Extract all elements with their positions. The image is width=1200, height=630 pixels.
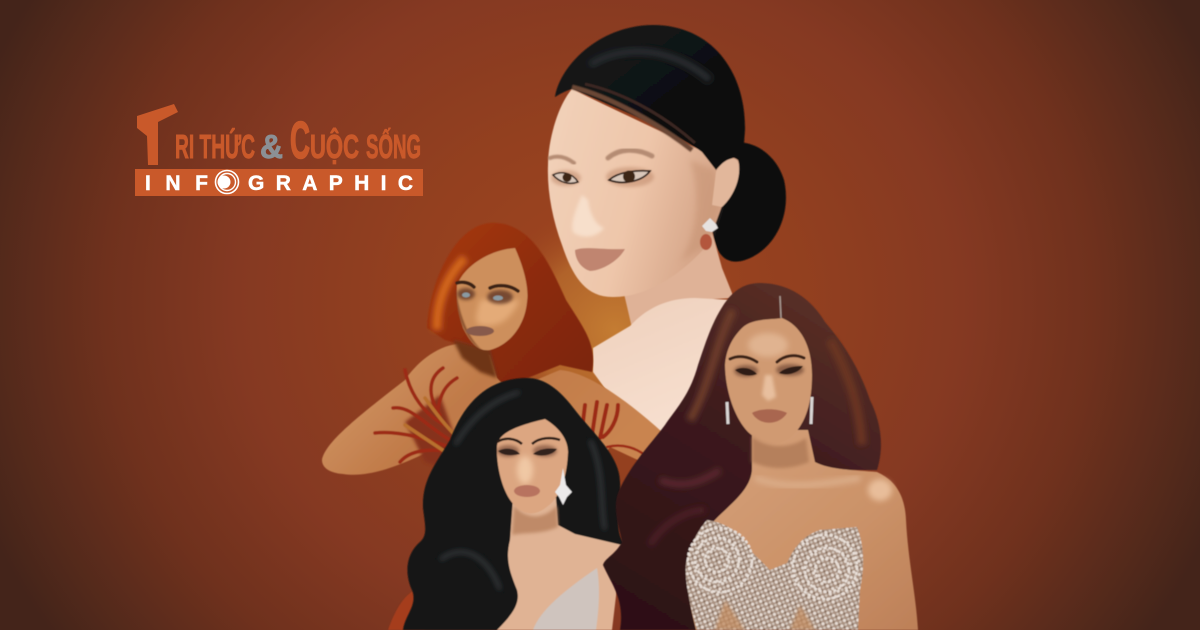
figure: red-haired woman (left) — [322, 223, 662, 630]
hair — [427, 223, 593, 392]
sparkling dress — [533, 568, 599, 630]
lips — [575, 248, 625, 271]
brows — [457, 282, 518, 291]
eye shadows — [457, 288, 513, 304]
logo wordmark: SỐNG — [366, 127, 421, 165]
face — [457, 248, 528, 350]
earrings — [727, 397, 812, 424]
logo wordmark: RI THỨC — [175, 128, 255, 165]
hair sheen — [440, 392, 605, 590]
long hair — [603, 283, 881, 630]
bustier skin panels — [715, 600, 815, 630]
hair — [403, 378, 625, 630]
lips — [466, 326, 494, 336]
hair sheen — [650, 310, 862, 545]
left feather cuff — [375, 368, 457, 478]
skin: neck, chest, shoulder, arm — [688, 430, 918, 630]
logo wordmark: & — [260, 128, 283, 165]
banner icon: target O — [216, 170, 238, 194]
bun — [711, 142, 786, 262]
eye shadow — [551, 167, 654, 187]
lips — [752, 409, 787, 423]
right feather cuff — [582, 402, 648, 458]
hair highlights — [572, 51, 710, 150]
figure: brunette woman in silver gown (front right) — [603, 283, 918, 630]
hair parting — [780, 296, 781, 318]
shoulder — [593, 298, 735, 445]
eyes — [462, 292, 503, 300]
collar bone shading — [755, 478, 860, 485]
logo wordmark — [175, 112, 421, 170]
eyes — [553, 170, 650, 183]
face shading — [680, 160, 720, 262]
nose — [762, 375, 776, 401]
nose shading — [572, 195, 604, 237]
neck — [622, 232, 734, 328]
forehead light — [748, 333, 788, 357]
golden glow behind the figures — [485, 205, 745, 455]
hair — [555, 25, 745, 170]
beaded bustier — [686, 520, 863, 630]
bustier swirl patterns — [688, 528, 857, 599]
brows — [730, 356, 804, 362]
logo: Tri Thức & Cuộc Sống Infographic — [135, 104, 423, 196]
eyes and brows — [497, 438, 560, 456]
figure: black-haired woman (front left) — [403, 378, 625, 630]
face — [548, 89, 739, 297]
eyes — [735, 366, 803, 376]
lower left dress fragment — [388, 588, 425, 630]
face light — [476, 299, 520, 326]
hair highlight — [437, 258, 465, 330]
logo wordmark: C — [290, 112, 310, 170]
shadow under chin — [453, 340, 497, 378]
earring — [700, 218, 718, 250]
earring — [555, 468, 572, 505]
banner text: INF — [145, 172, 208, 195]
face — [497, 419, 568, 513]
logo banner — [135, 169, 423, 196]
shoulder highlight — [868, 479, 892, 501]
lips — [514, 485, 540, 497]
figure: woman with black bun (top centre) — [548, 25, 786, 445]
left feather cuff mass — [405, 395, 456, 470]
banner text — [145, 172, 413, 195]
eye shadows — [497, 445, 557, 457]
eye shadows — [734, 364, 804, 377]
neck shadow — [752, 436, 809, 468]
neck shadow — [512, 505, 558, 535]
banner text: GRAPHIC — [248, 172, 413, 195]
ear — [712, 159, 739, 207]
face shadow — [457, 295, 482, 350]
face light — [517, 456, 533, 484]
brows — [550, 150, 652, 163]
logo icon: stylised T — [137, 104, 178, 165]
neck and chest — [497, 498, 622, 630]
face — [725, 318, 812, 444]
logo wordmark: UỘC — [310, 127, 359, 165]
body and arms — [322, 344, 662, 475]
